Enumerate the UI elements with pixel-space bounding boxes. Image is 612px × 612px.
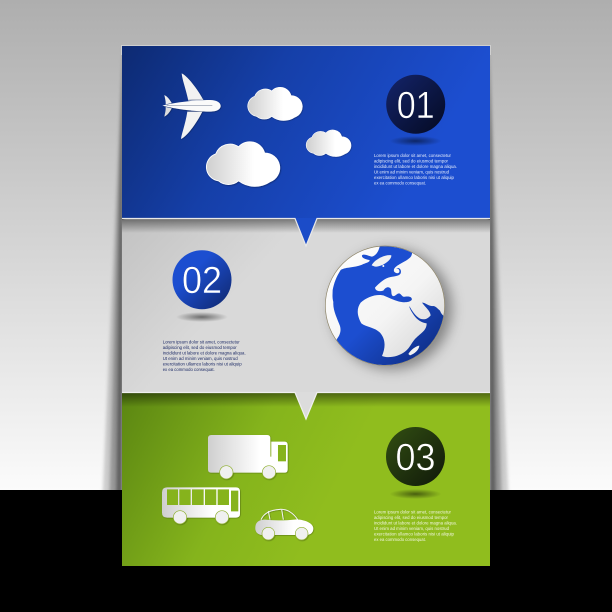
icon: car [255, 509, 313, 540]
shadow under badge 01 [390, 136, 442, 146]
icon: cloud top [248, 87, 302, 120]
icon: globe [320, 245, 447, 373]
green top shadow [122, 393, 490, 407]
panel: blue travel [122, 46, 490, 246]
text block 02: exercitation ullamco laboris nisi ut aliquip [163, 362, 242, 366]
text block 03 [374, 510, 457, 542]
poster shadow right [489, 46, 509, 510]
text block 02: Ut enim ad minim veniam, quis nostrud [163, 356, 238, 361]
icon: bus [162, 487, 240, 524]
text block 03: Ut enim ad minim veniam, quis nostrud [374, 526, 449, 531]
badge 02: 02 [182, 260, 222, 302]
badge 01: 01 [397, 85, 435, 127]
blue pointer to gray panel [295, 218, 317, 246]
green background [122, 393, 490, 566]
text block 01: adipiscing elit, sed do eiusmod tempor [374, 158, 448, 164]
text block 02: incididunt ut labore et dolore magna aliqua. [163, 350, 246, 356]
icon: airplane [162, 73, 221, 139]
icon: cloud large [206, 142, 280, 186]
gray background [122, 220, 490, 392]
text block 01: exercitation ullamco laboris nisi ut aliquip [374, 175, 454, 180]
text block 01 [374, 153, 457, 186]
text block 03: Lorem ipsum dolor sit amet, consectetur [374, 510, 451, 514]
gray top shadow [122, 219, 490, 233]
text block 03: exercitation ullamco laboris nisi ut aliquip [374, 532, 454, 536]
divider line with pointer into gray panel [122, 218, 490, 246]
floor [0, 490, 612, 612]
icon: truck [208, 435, 288, 479]
text block 02 [163, 340, 246, 372]
text block 01: ex ea commodo consequat. [374, 180, 426, 186]
panel: green transport [122, 393, 490, 566]
badge 03: 03 [396, 437, 436, 479]
text block 03: ex ea commodo consequat. [374, 537, 426, 542]
shadow under badge 02 [176, 312, 228, 322]
text block 01: Lorem ipsum dolor sit amet, consectetur [374, 153, 451, 158]
text block 02: adipiscing elit, sed do eiusmod tempor [163, 345, 237, 350]
text block 03: adipiscing elit, sed do eiusmod tempor [374, 515, 448, 520]
panel: gray globe [122, 219, 490, 419]
poster shadow left [102, 46, 123, 510]
shadow under badge 03 [390, 489, 442, 499]
badge 01 [386, 75, 445, 134]
divider line with pointer into green panel [122, 392, 490, 419]
text block 03: incididunt ut labore et dolore magna aliqua. [374, 520, 457, 526]
text block 02: Lorem ipsum dolor sit amet, consectetur [163, 340, 240, 344]
text block 02: ex ea commodo consequat. [163, 367, 215, 372]
text block 01: incididunt ut labore et dolore magna aliqua. [374, 164, 457, 169]
poster rim [121, 45, 491, 55]
badge 02 [172, 250, 232, 309]
gray pointer to green panel [295, 392, 317, 419]
text block 01: Ut enim ad minim veniam, quis nostrud [374, 170, 449, 174]
icon: cloud right [306, 130, 351, 157]
badge 03 [386, 427, 445, 486]
blue background [122, 46, 490, 218]
